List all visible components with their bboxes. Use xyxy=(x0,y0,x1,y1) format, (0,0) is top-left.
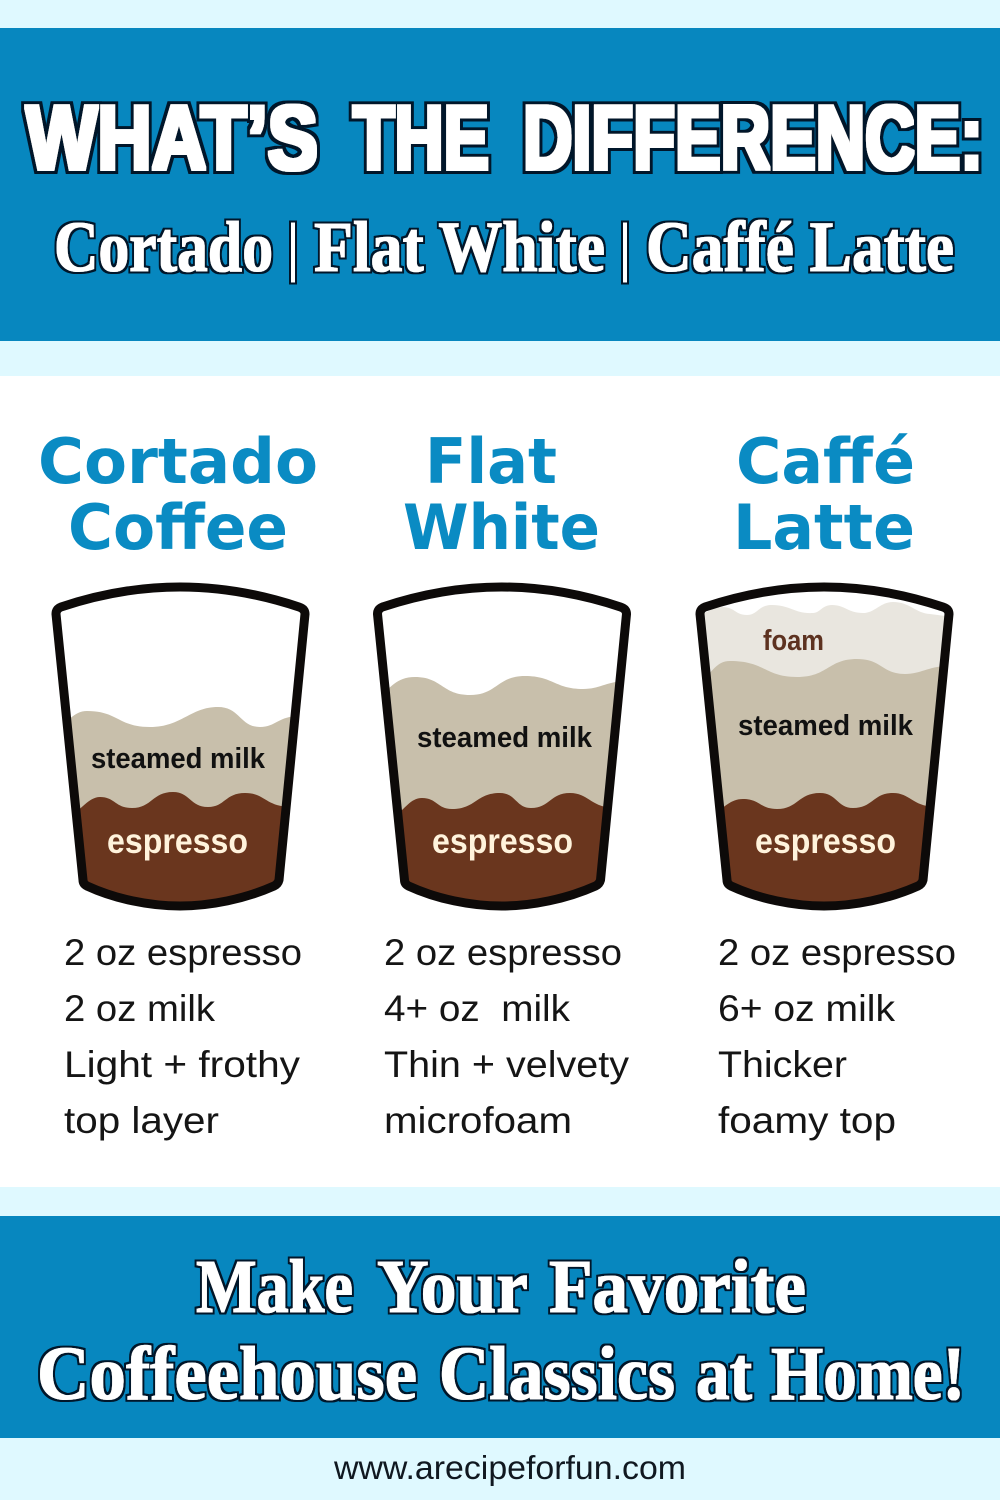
text: caffe latte details: foamy top xyxy=(718,1100,896,1141)
text: cortado details: top layer xyxy=(64,1100,219,1141)
panel: comparison xyxy=(0,376,1000,1187)
text: caffe latte details: 6+ oz milk xyxy=(718,988,896,1029)
call to action: Coffeehouse xyxy=(37,1332,417,1416)
call to action: Your xyxy=(377,1245,528,1329)
text: flat white details: microfoam xyxy=(384,1100,572,1141)
icon: flat white cup: espresso xyxy=(432,822,573,861)
icon: flat white cup xyxy=(370,587,630,920)
title: THE xyxy=(353,88,489,189)
call to action: Make xyxy=(196,1245,353,1329)
column: cortado xyxy=(38,425,318,1141)
column: caffe latte xyxy=(690,425,960,1141)
icon: cortado cup: espresso xyxy=(107,822,248,861)
heading: cortado coffee: Coffee xyxy=(68,491,288,564)
heading: flat white xyxy=(403,425,600,564)
icon: cortado cup xyxy=(50,587,310,920)
heading: cortado coffee xyxy=(38,425,318,564)
text: cortado details: Light + frothy xyxy=(64,1044,301,1085)
text: flat white details: Thin + velvety xyxy=(384,1044,630,1085)
icon: caffe latte cup: espresso xyxy=(755,822,896,861)
text: caffe latte details: 2 oz espresso xyxy=(718,932,956,973)
call to action xyxy=(37,1245,965,1416)
text: caffe latte details: Thicker xyxy=(718,1044,847,1085)
panel: bottom banner xyxy=(0,1216,1000,1438)
call to action: at xyxy=(696,1332,752,1416)
panel: top banner xyxy=(0,28,1000,341)
call to action: Classics xyxy=(439,1332,675,1416)
icon: caffe latte cup: steamed milk xyxy=(738,710,914,742)
call to action: Favorite xyxy=(549,1245,806,1329)
column: flat white xyxy=(370,425,630,1141)
text: cortado details xyxy=(64,932,302,1141)
heading: flat white: Flat xyxy=(425,425,557,498)
call to action: Home! xyxy=(771,1332,965,1416)
text: flat white details: 4+ oz milk xyxy=(384,988,571,1029)
heading: caffe latte: Caffé xyxy=(736,425,915,498)
icon: caffe latte cup xyxy=(690,587,960,920)
text: cortado details: 2 oz espresso xyxy=(64,932,302,973)
text: cortado details: 2 oz milk xyxy=(64,988,216,1029)
text: flat white details xyxy=(384,932,630,1141)
text: flat white details: 2 oz espresso xyxy=(384,932,622,973)
icon: caffe latte cup: foam xyxy=(763,625,824,657)
heading: cortado coffee: Cortado xyxy=(38,425,318,498)
text: caffe latte details xyxy=(718,932,956,1141)
heading: caffe latte: Latte xyxy=(733,491,915,564)
subtitle: Flat White xyxy=(314,207,605,287)
heading: caffe latte xyxy=(733,425,915,564)
title: WHAT’S xyxy=(26,88,318,189)
subtitle: Cortado xyxy=(54,207,273,287)
title xyxy=(26,88,983,189)
icon: flat white cup: steamed milk xyxy=(417,722,593,754)
website url: www.arecipeforfun.com xyxy=(333,1449,686,1486)
subtitle: Caffé Latte xyxy=(646,207,954,287)
heading: flat white: White xyxy=(403,491,600,564)
icon: cortado cup: steamed milk xyxy=(91,743,266,775)
subtitle xyxy=(54,207,954,287)
